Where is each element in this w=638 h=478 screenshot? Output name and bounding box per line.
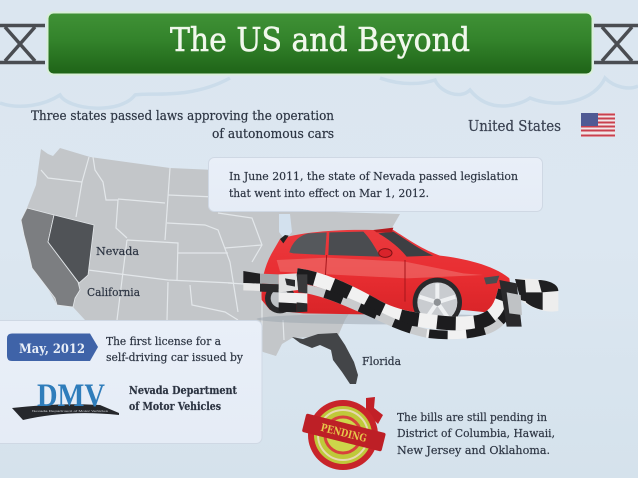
license text <box>106 334 243 364</box>
car body <box>261 230 510 314</box>
land mass <box>21 148 400 356</box>
agency name: of Motor Vehicles <box>129 400 221 413</box>
state borders <box>41 157 284 340</box>
agency name <box>129 384 238 413</box>
pending bills text: New Jersey and Oklahoma. <box>397 443 550 457</box>
ribbon main band <box>297 275 513 335</box>
pending bills text: The bills are still pending in <box>397 410 548 424</box>
intro heading: Three states passed laws approving the operation <box>31 109 335 124</box>
panel: first license <box>0 320 262 444</box>
icon: US flag <box>581 113 615 137</box>
red car wrapped in checkered ribbon <box>243 228 558 335</box>
stamp label: PENDING <box>319 422 368 445</box>
license text: self-driving car issued by <box>106 350 243 364</box>
body highlight <box>277 258 483 278</box>
callout: Nevada legislation <box>208 158 542 212</box>
license text: The first license for a <box>106 334 221 348</box>
icon: DMV logo <box>12 378 119 420</box>
callout: Nevada legislation: In June 2011, the state of Nevada passed legislation <box>229 169 519 183</box>
state label: California: California <box>87 286 140 299</box>
headlight <box>484 276 499 284</box>
rear roof trim <box>280 235 289 243</box>
rear wheel <box>265 283 295 313</box>
date tag: May, 2012 <box>19 342 85 357</box>
title text: The US and Beyond <box>170 20 470 59</box>
car shadow <box>257 314 517 324</box>
callout: Nevada legislation: that went into effect on Mar 1, 2012. <box>229 186 429 200</box>
ribbon left tail <box>243 271 307 312</box>
intro heading <box>31 109 335 142</box>
door seams <box>325 255 405 302</box>
pending bills text: District of Columbia, Hawaii, <box>397 426 555 440</box>
Florida <box>292 333 358 384</box>
front wheel <box>413 278 462 327</box>
pending bills text <box>397 410 555 457</box>
mirror <box>379 249 392 257</box>
right sign post truss <box>594 26 638 62</box>
agency name: Nevada Department <box>129 384 238 397</box>
state label: Nevada: Nevada <box>96 245 139 258</box>
left sign post truss <box>0 26 45 62</box>
state label: Florida: Florida <box>362 355 401 368</box>
Nevada <box>48 215 94 283</box>
country label: United States <box>468 119 561 135</box>
roof spoiler <box>373 228 393 232</box>
date tag <box>7 334 98 361</box>
icon: DMV logo: DMV <box>37 378 105 414</box>
icon: pending stamp <box>302 397 386 470</box>
title sign <box>48 12 592 74</box>
map of the United States <box>21 148 401 384</box>
cloud outlines behind the title sign <box>0 78 638 108</box>
windows <box>289 232 327 255</box>
lake <box>279 214 292 240</box>
ribbon right tail <box>499 279 558 327</box>
California <box>21 208 80 307</box>
icon: DMV logo: Nevada Department of Motor Vehicles <box>32 409 109 413</box>
intro heading: of autonomous cars <box>212 127 334 142</box>
